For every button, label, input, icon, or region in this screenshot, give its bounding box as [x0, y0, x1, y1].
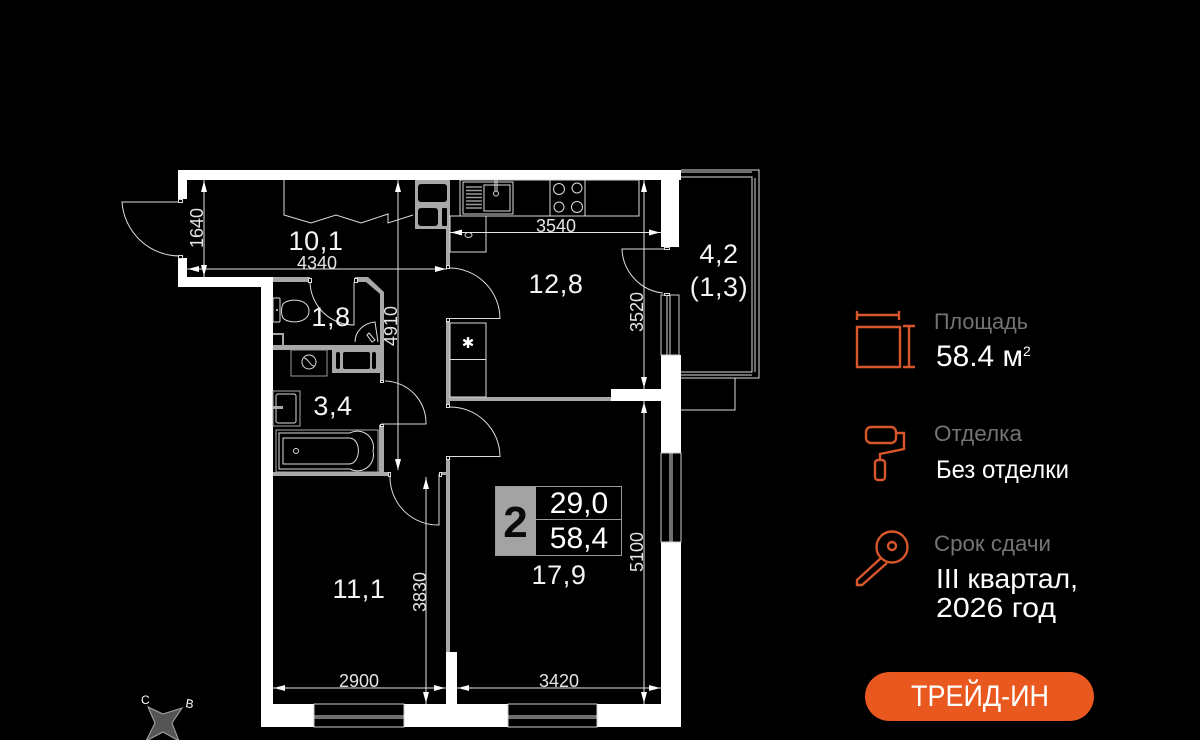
storage units	[415, 180, 450, 229]
kitchen counter	[460, 180, 639, 216]
dimension labels: 4340	[297, 253, 337, 273]
apartment summary box	[495, 486, 622, 556]
dimension labels: 3830	[410, 572, 430, 612]
button: trade-in	[865, 672, 1094, 721]
dimension labels: 3420	[539, 671, 579, 691]
dimension labels: 4910	[381, 306, 401, 346]
bathroom sink	[273, 391, 300, 426]
icon: paint roller	[866, 427, 904, 480]
floor plan	[122, 170, 759, 727]
room areas: 12,8	[529, 269, 583, 299]
room areas: 11,1	[333, 574, 385, 604]
room areas: 4,2	[699, 239, 739, 269]
fridge and cabinet	[450, 323, 486, 397]
kitchen utility box	[450, 216, 486, 252]
washer	[291, 350, 327, 376]
label: area: 2	[1023, 343, 1031, 359]
room areas	[289, 226, 748, 604]
room areas: 3,4	[313, 391, 353, 421]
bathtub	[276, 430, 378, 472]
room areas: 1,8	[311, 302, 351, 332]
doors	[122, 202, 668, 525]
room areas: 17,9	[532, 560, 586, 590]
corner basin	[355, 322, 378, 342]
balcony	[681, 170, 759, 410]
dimension labels: 1640	[187, 208, 207, 248]
dimension labels	[187, 208, 647, 691]
compass: В	[184, 696, 195, 711]
label: area: Площадь	[934, 309, 1028, 334]
dimension labels: 5100	[627, 532, 647, 572]
compass	[141, 693, 195, 740]
button: trade-in: ТРЕЙД-ИН	[911, 679, 1049, 713]
room areas: (1,3)	[690, 272, 748, 302]
label: finish: Без отделки	[936, 456, 1069, 484]
wardrobe	[284, 180, 413, 223]
dimension labels: 2900	[339, 671, 379, 691]
label: delivery date: Срок сдачи	[934, 531, 1051, 556]
door jambs	[178, 200, 670, 476]
fridge and cabinet: ✱	[462, 335, 474, 352]
dimension labels: 3540	[536, 216, 576, 236]
apartment summary box: 58,4	[550, 522, 608, 555]
label: area	[934, 309, 1031, 373]
apartment summary box: 29,0	[550, 487, 608, 520]
interior partitions	[273, 180, 611, 652]
dimension labels: 3520	[627, 292, 647, 332]
label: finish: Отделка	[934, 421, 1023, 446]
label: delivery date: 2026 год	[936, 592, 1056, 623]
label: finish	[934, 421, 1069, 484]
shaft	[332, 350, 380, 373]
exterior walls	[178, 170, 681, 727]
toilet	[273, 298, 309, 322]
label: area: 58.4 м	[936, 340, 1023, 373]
label: delivery date: III квартал,	[936, 563, 1078, 594]
compass: С	[141, 693, 150, 707]
label: delivery date	[934, 531, 1078, 623]
icon: area	[857, 311, 915, 367]
apartment summary box: 2	[503, 498, 528, 547]
room areas: 10,1	[289, 226, 343, 256]
windows	[314, 295, 681, 727]
icon: key	[857, 532, 908, 585]
dimension arrows	[187, 180, 661, 704]
